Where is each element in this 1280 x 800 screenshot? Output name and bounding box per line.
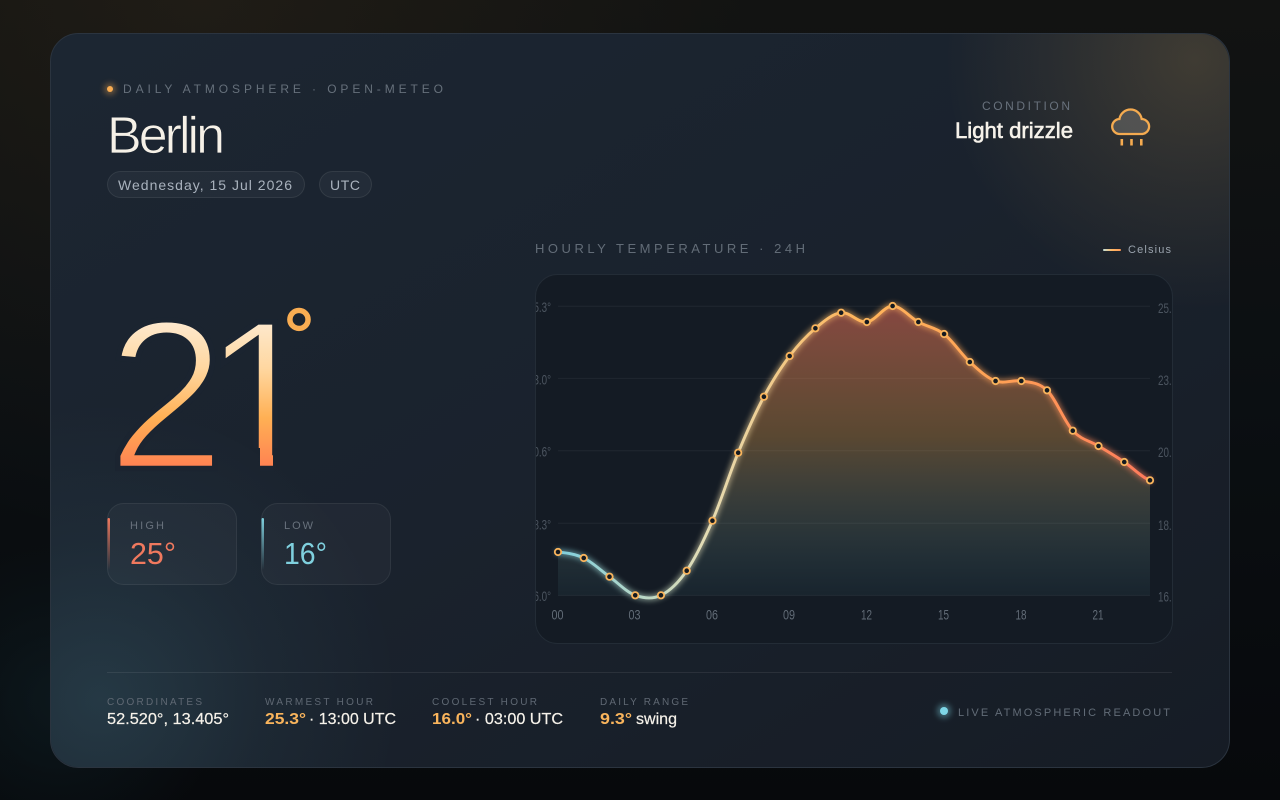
hour axis labels: 03 bbox=[628, 608, 640, 622]
grid and axis labels: 20.6° bbox=[528, 445, 551, 460]
footer stat: daily range: 9.3° bbox=[600, 711, 632, 728]
hour axis labels: 15 bbox=[938, 608, 949, 622]
grid and axis labels bbox=[528, 300, 1181, 604]
footer stat: daily range: DAILY RANGE bbox=[600, 697, 688, 708]
tile: low: LOW bbox=[284, 520, 314, 532]
footer stat: coordinates: 52.520°, 13.405° bbox=[107, 711, 229, 728]
grid and axis labels: 25.3° bbox=[1158, 301, 1181, 316]
footer divider bbox=[107, 672, 1172, 673]
tile: low bbox=[262, 504, 390, 584]
footer stat: coolest hour bbox=[432, 697, 563, 728]
chart legend bbox=[1103, 244, 1172, 256]
footer stat: warmest hour bbox=[265, 697, 396, 728]
current temperature: 2 bbox=[107, 276, 225, 514]
date chip: Wednesday, 15 Jul 2026 bbox=[118, 177, 292, 193]
hour axis labels: 06 bbox=[706, 608, 718, 622]
chart panel: hourly temperature bbox=[528, 274, 1181, 644]
eyebrow label: DAILY ATMOSPHERE · OPEN-METEO bbox=[123, 82, 443, 96]
hour axis labels: 00 bbox=[552, 608, 564, 622]
tile: low: 16° bbox=[284, 536, 327, 571]
grid and axis labels: 25.3° bbox=[528, 300, 551, 315]
grid and axis labels: 18.3° bbox=[528, 517, 551, 532]
condition text: CONDITION bbox=[982, 99, 1070, 113]
tile: high: HIGH bbox=[130, 520, 164, 532]
footer stat: coolest hour: COOLEST HOUR bbox=[432, 697, 537, 708]
grid and axis labels: 23.0° bbox=[528, 372, 551, 387]
title: city: Berlin bbox=[107, 107, 225, 165]
icon: rain cloud bbox=[1112, 110, 1149, 146]
footer stat: warmest hour: WARMEST HOUR bbox=[265, 697, 373, 708]
condition text bbox=[955, 99, 1073, 143]
date chip bbox=[108, 172, 304, 198]
grid and axis labels: 18.3° bbox=[1158, 518, 1181, 533]
footer stat: coolest hour: 16.0° bbox=[432, 711, 472, 728]
footer stat: warmest hour: · 13:00 UTC bbox=[309, 711, 396, 728]
tile: high: 25° bbox=[130, 536, 176, 571]
grid and axis labels: 16.0° bbox=[1158, 590, 1181, 604]
timezone chip: UTC bbox=[330, 177, 360, 193]
footer stat: coordinates bbox=[107, 697, 229, 728]
live status indicator: LIVE ATMOSPHERIC READOUT bbox=[958, 707, 1170, 719]
current temperature: 1 bbox=[202, 276, 321, 514]
tile: high bbox=[108, 504, 236, 584]
grid and axis labels: 16.0° bbox=[528, 589, 551, 604]
hourly data points bbox=[555, 303, 1153, 598]
hour axis labels: 09 bbox=[783, 608, 795, 622]
current temperature bbox=[120, 308, 311, 466]
hour axis labels: 18 bbox=[1016, 608, 1026, 622]
condition text: Light drizzle bbox=[955, 118, 1073, 143]
grid and axis labels: 23.0° bbox=[1158, 373, 1181, 388]
chart legend: Celsius bbox=[1128, 244, 1172, 256]
current temperature: ° bbox=[283, 292, 315, 381]
grid and axis labels: 20.6° bbox=[1158, 445, 1181, 460]
footer stat: coolest hour: · 03:00 UTC bbox=[475, 711, 563, 728]
hour axis labels bbox=[552, 608, 1104, 622]
temperature line bbox=[558, 306, 1150, 598]
footer stat: daily range: swing bbox=[636, 711, 677, 728]
hour axis labels: 21 bbox=[1092, 608, 1104, 622]
footer stat: daily range bbox=[600, 697, 688, 728]
hour axis labels: 12 bbox=[861, 608, 872, 622]
footer stat: coordinates: COORDINATES bbox=[107, 697, 202, 708]
footer stat: warmest hour: 25.3° bbox=[265, 711, 306, 728]
timezone chip bbox=[320, 172, 372, 198]
area under curve bbox=[558, 306, 1150, 598]
chart heading: HOURLY TEMPERATURE · 24H bbox=[535, 241, 805, 256]
